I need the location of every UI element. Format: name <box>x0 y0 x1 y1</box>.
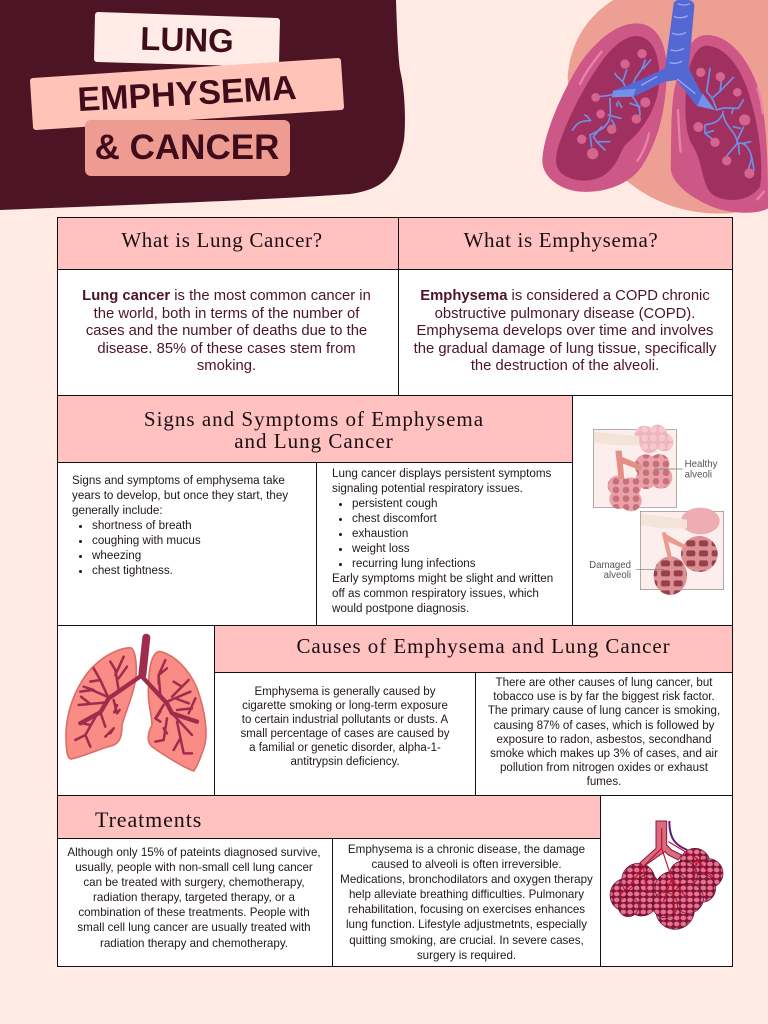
paragraph: lung cancer <box>82 288 371 374</box>
list: emphysema symptoms: Signs and symptoms of emphysema take <box>72 474 285 487</box>
text cell: emphysema treatments <box>332 838 601 967</box>
paragraph: lung cancer: disease. 85% of these cases stem from <box>97 341 356 357</box>
heading: what is emphysema <box>398 217 733 270</box>
text cell: causes of emphysema <box>214 672 476 796</box>
diagram: healthy and damaged alveoli <box>589 424 724 595</box>
list: lung cancer symptoms: exhaustion <box>352 527 408 540</box>
paragraph: emphysema: the gradual damage of lung tissue, specifically <box>414 341 716 357</box>
list: lung cancer symptoms: signaling potential respiratory issues. Early symptoms might be slight and written <box>332 482 553 585</box>
paragraph: emphysema: Emphysema is considered a COPD chronic <box>420 288 710 304</box>
paragraph: causes of lung cancer <box>488 677 720 788</box>
paragraph: emphysema treatments: surgery is required. <box>417 949 516 962</box>
heading: what is emphysema: What is Emphysema? <box>464 228 658 252</box>
paragraph: causes of lung cancer: smoke which makes up 3% of cases, and air <box>490 748 718 760</box>
diagram: healthy and damaged alveoli: Damaged <box>589 560 631 571</box>
paragraph: causes of lung cancer: The primary cause of lung cancer is smoking, <box>488 705 720 717</box>
paragraph: emphysema treatments: Medications, bronchodilators and oxygen therapy <box>340 873 593 886</box>
list: lung cancer symptoms: persistent cough <box>352 497 437 510</box>
text cell: emphysema symptoms <box>57 462 317 626</box>
panel: treatments <box>57 796 733 967</box>
heading: what is lung cancer <box>57 217 399 270</box>
list: emphysema symptoms: shortness of breath <box>92 519 192 532</box>
list: emphysema symptoms: years to develop, but once they start, they <box>72 489 288 502</box>
list: lung cancer symptoms <box>332 467 553 615</box>
title <box>30 12 344 176</box>
paragraph: emphysema treatments: Emphysema is a chronic disease, the damage <box>348 843 585 856</box>
list: emphysema symptoms: chest tightness. <box>92 564 173 577</box>
paragraph: emphysema treatments: quitting smoking, are crucial. In severe cases, <box>349 934 584 947</box>
list: emphysema symptoms: generally include: <box>72 504 163 517</box>
paragraph: emphysema treatments: caused to alveoli is often irreversible. <box>371 858 562 871</box>
title ribbon: and cancer <box>85 120 290 176</box>
paragraph: emphysema <box>414 288 716 374</box>
paragraph: causes of emphysema: cigarette smoking or long-term exposure <box>242 700 448 712</box>
paragraph: lung cancer: Lung cancer is the most common cancer in <box>82 288 371 304</box>
illustration: lungs with blue bronchi <box>542 0 768 214</box>
list: emphysema symptoms <box>72 474 288 577</box>
paragraph: lung cancer treatments: can be treated with surgery, chemotherapy, <box>83 876 305 889</box>
heading: treatments: Treatments <box>95 807 202 832</box>
paragraph: lung cancer: cases and the number of deaths due to the <box>86 323 367 339</box>
paragraph: causes of lung cancer: fumes. <box>587 776 621 788</box>
paragraph: causes of emphysema: a familial or genetic disorder, alpha-1- <box>249 742 441 754</box>
panel: what is lung cancer / emphysema <box>57 217 733 395</box>
paragraph: emphysema treatments: rehabilitation, focusing on exercises enhances <box>348 903 585 916</box>
paragraph: causes of emphysema: antitrypsin deficiency. <box>290 756 400 768</box>
heading: causes <box>214 625 733 674</box>
list: lung cancer symptoms: weight loss <box>352 542 410 555</box>
paragraph: lung cancer treatments: usually, people with non-small cell lung cancer <box>75 861 313 874</box>
list: emphysema symptoms: coughing with mucus <box>92 534 201 547</box>
paragraph: emphysema treatments: lung function. Lifestyle adjustmetnts, especially <box>346 918 587 931</box>
image cell: alveoli cluster <box>600 795 733 967</box>
panel: causes <box>57 626 733 795</box>
list: lung cancer symptoms: off as common respiratory issues, which <box>332 587 539 600</box>
heading: signs and symptoms: and Lung Cancer <box>234 429 394 453</box>
paragraph: causes of lung cancer: tobacco use is by far the biggest risk factor. <box>493 691 715 703</box>
paragraph: causes of emphysema: small percentage of cases are caused by <box>240 728 450 740</box>
text cell: lung cancer definition <box>57 269 399 396</box>
text cell: emphysema definition <box>398 269 733 396</box>
diagram: healthy and damaged alveoli: alveoli <box>685 470 712 481</box>
image cell: alveoli diagram <box>572 395 733 626</box>
paragraph: causes of lung cancer: causing 87% of cases, which is followed by <box>494 720 714 732</box>
panel: signs and symptoms <box>57 396 733 625</box>
heading: causes: Causes of Emphysema and Lung Cancer <box>296 634 671 658</box>
icon: alveoli cluster <box>610 820 724 930</box>
paragraph: lung cancer treatments <box>67 846 321 950</box>
title ribbon: lung: LUNG <box>140 20 234 59</box>
paragraph: emphysema: the destruction of the alveoli. <box>471 358 659 374</box>
title ribbon: and cancer: & CANCER <box>95 128 279 167</box>
title ribbon: emphysema <box>30 58 344 130</box>
heading: signs and symptoms <box>57 395 573 463</box>
paragraph: lung cancer treatments: radiation therapy and chemotherapy. <box>100 937 288 950</box>
list: lung cancer symptoms: recurring lung infections <box>352 557 476 570</box>
diagram: healthy and damaged alveoli: alveoli <box>604 570 631 581</box>
paragraph: causes of lung cancer: There are other causes of lung cancer, but <box>496 677 712 689</box>
list: lung cancer symptoms: chest discomfort <box>352 512 437 525</box>
paragraph: causes of emphysema: Emphysema is generally caused by <box>255 686 435 698</box>
paragraph: causes of emphysema: to certain industrial pollutants or dusts. A <box>242 714 448 726</box>
list: lung cancer symptoms: would postpone diagnosis. <box>332 602 469 615</box>
paragraph: emphysema treatments: help alleviate breathing difficulties. Pulmonary <box>349 888 584 901</box>
paragraph: lung cancer: the world, both in terms of the number of <box>94 306 359 322</box>
heading: treatments <box>57 795 602 840</box>
paragraph: causes of lung cancer: pollution from nitrogen oxides or exhaust <box>500 762 708 774</box>
header dark blob <box>0 0 405 210</box>
title ribbon: lung <box>94 12 280 66</box>
paragraph: lung cancer treatments: small cell lung cancer are usually treated with <box>77 921 311 934</box>
paragraph: emphysema: Emphysema develops over time and involves <box>417 323 713 339</box>
image cell: bronchial tree lungs <box>57 625 215 796</box>
heading: signs and symptoms: Signs and Symptoms of Emphysema <box>144 407 484 431</box>
text cell: lung cancer treatments <box>57 838 333 967</box>
paragraph: emphysema: obstructive pulmonary disease (COPD). <box>435 306 695 322</box>
list: emphysema symptoms: wheezing <box>92 549 141 562</box>
paragraph: lung cancer treatments: Although only 15% of pateints diagnosed survive, <box>67 846 321 859</box>
paragraph: emphysema treatments <box>340 843 593 962</box>
text cell: lung cancer symptoms <box>316 462 574 626</box>
text cell: causes of lung cancer <box>475 672 733 796</box>
paragraph: lung cancer treatments: combination of these treatments. People with <box>78 906 310 919</box>
paragraph: lung cancer treatments: radiation therapy, targeted therapy, or a <box>93 891 295 904</box>
heading: what is lung cancer: What is Lung Cancer? <box>121 228 323 252</box>
paragraph: lung cancer: smoking. <box>197 358 256 374</box>
icon: red lungs <box>65 634 207 772</box>
list: lung cancer symptoms: Lung cancer displays persistent symptoms <box>332 467 551 480</box>
title ribbon: emphysema: EMPHYSEMA <box>77 69 297 119</box>
paragraph: causes of lung cancer: exposure to radon, asbestos, secondhand <box>496 734 712 746</box>
diagram: healthy and damaged alveoli: Healthy <box>685 459 718 470</box>
paragraph: causes of emphysema <box>240 686 450 768</box>
